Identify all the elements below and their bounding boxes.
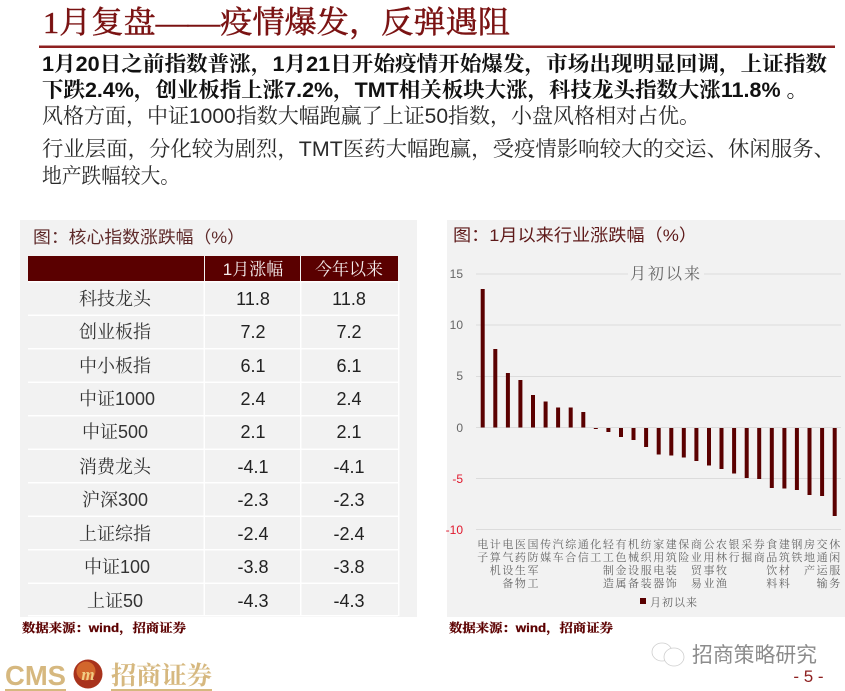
table header: 今年以来 [315,259,383,279]
category labels: 传 [540,537,551,551]
table rows: -2.4 [333,524,365,544]
category labels: 设 [628,564,639,577]
icon: logo emblem: m [81,665,95,684]
y axis labels: 15 [450,267,463,281]
category labels: 备 [628,577,639,590]
category labels: 筑 [779,551,790,564]
table rows: -4.1 [237,457,269,477]
table rows: -4.3 [333,591,365,611]
y axis labels: 0 [456,421,463,435]
category labels: 有 [616,538,626,551]
text block: summary: 风格方面，中证1000指数大幅跑赢了上证50指数，小盘风格相对占优。 [42,105,700,129]
category labels: 装 [641,576,652,590]
category labels: 服 [829,564,840,577]
category labels: 纺 [641,538,652,551]
category labels: 牧 [716,563,727,577]
category labels: 商 [754,550,765,564]
category labels: 械 [628,550,639,564]
category labels: 电 [653,563,664,577]
category labels: 券 [754,538,765,551]
table rows: -3.8 [333,557,365,577]
y axis labels: 5 [456,369,463,383]
category labels: 防 [528,551,538,564]
table rows: 上证50 [87,591,143,611]
panel: core index table [20,220,417,617]
table rows: 6.1 [240,356,266,376]
category labels: 建 [779,537,790,551]
category labels: 物 [515,576,526,590]
icon: chat bubbles [652,643,684,666]
table rows: -2.3 [237,490,269,510]
category labels: 运 [817,564,829,577]
category labels: 造 [603,576,614,590]
chart legend: 月初以来 [650,595,698,609]
category labels: 生 [515,563,526,577]
table rows: -4.3 [237,591,269,611]
category labels: 药 [515,550,526,564]
chart title: 月初以来 [630,265,702,283]
table rows: 上证综指 [79,524,151,544]
category labels: 筑 [666,551,677,564]
category labels: 电 [477,537,488,551]
category labels: 子 [477,551,488,564]
table rows: 6.1 [336,356,362,376]
table rows: 中小板指 [79,356,151,376]
category labels: 通 [817,551,828,564]
panel: industry bar chart [446,220,845,617]
category labels: 采 [741,538,752,551]
category labels: 用 [704,551,714,564]
table header: 1月涨幅 [223,260,283,279]
category labels: 工 [590,551,601,564]
category labels: 钢 [791,537,802,551]
category labels [477,537,840,590]
category labels: 工 [528,577,538,590]
icon: logo emblem [74,660,102,688]
category labels: 制 [603,563,614,577]
y axis labels: -5 [452,472,463,486]
y axis labels: 10 [450,318,463,332]
category labels: 休 [829,537,840,551]
table rows: 创业板指 [79,322,151,342]
table rows: 11.8 [332,289,366,309]
table rows: -2.4 [237,524,269,544]
table rows: -2.3 [333,490,365,510]
category labels: 电 [502,537,513,551]
logo: CMS: 招商证券 [111,662,212,690]
category labels: 车 [553,551,564,564]
table rows: 7.2 [336,322,362,342]
category labels: 金 [616,563,626,577]
category labels: 机 [628,537,639,551]
table rows: 中证500 [82,422,148,442]
table rows [28,281,400,616]
category labels: 属 [616,577,626,590]
left source note: 数据来源：wind，招商证券 [22,620,186,635]
category labels: 器 [653,577,664,590]
category labels: 保 [678,537,689,551]
category labels: 林 [716,550,727,564]
text block: summary: 1月20日之前指数普涨，1月21日开始疫情开始爆发，市场出现明显回调，上证指数 [42,53,827,77]
text block: summary: 地产跌幅较大。 [42,165,180,188]
category labels: 材 [779,563,790,577]
category labels: 房 [804,537,815,551]
category labels: 输 [817,576,828,590]
category labels: 闲 [829,550,840,564]
table rows: 7.2 [240,322,266,342]
y axis labels [446,267,463,537]
table rows: 沪深300 [82,490,148,510]
table rows: 中证100 [84,557,150,577]
category labels: 用 [653,551,664,564]
left panel heading: 图：核心指数涨跌幅（%） [33,228,245,247]
logo: CMS: CMS [5,660,66,691]
category labels: 银 [729,537,740,551]
page number: - 5 - [793,667,824,686]
text block: summary: 行业层面，分化较为剧烈，TMT医药大幅跑赢，受疫情影响较大的交运、休闲服务、 [42,138,835,162]
category labels: 家 [653,537,664,551]
table rows: 中证1000 [79,389,155,409]
category labels: 媒 [540,550,551,564]
table header [28,256,398,281]
title: 1月复盘——疫情爆发，反弹遇阻 [43,5,510,40]
category labels: 色 [616,551,626,564]
right panel heading: 图：1月以来行业涨跌幅（%） [453,226,697,245]
category labels: 商 [691,537,702,551]
category labels: 农 [716,538,727,551]
text block: summary: 下跌2.4%，创业板指上涨7.2%，TMT相关板块大涨，科技龙头指数大涨11.8% 。 [42,79,808,103]
category labels: 食 [766,538,777,551]
category labels: 地 [804,550,815,564]
category labels: 备 [502,577,513,590]
category labels: 公 [704,539,714,551]
category labels: 掘 [741,550,752,564]
category labels: 机 [490,563,501,577]
category labels: 设 [502,564,513,577]
category labels: 汽 [553,538,564,551]
category labels: 产 [804,563,815,577]
table rows: -3.8 [237,557,269,577]
category labels: 气 [502,550,513,564]
category labels: 铁 [791,550,802,564]
category labels: 事 [704,563,714,577]
table rows: 11.8 [236,289,270,309]
category labels: 装 [666,563,677,577]
category labels: 算 [490,550,501,564]
category labels: 饮 [766,564,777,577]
category labels: 轻 [603,538,615,551]
category labels: 计 [490,537,501,551]
category labels: 合 [565,550,576,564]
category labels: 织 [641,551,653,564]
table rows: 2.4 [336,389,362,409]
right source note: 数据来源：wind，招商证券 [449,620,613,635]
category labels: 务 [829,576,840,590]
category labels: 交 [817,537,828,551]
category labels: 业 [691,550,702,564]
category labels: 医 [515,538,526,551]
category labels: 业 [704,576,714,590]
category labels: 易 [691,577,702,590]
category labels: 建 [666,537,677,551]
table rows: 2.1 [240,422,266,442]
category labels: 险 [678,550,689,564]
y axis labels: -10 [446,523,463,537]
category labels: 贸 [691,564,703,577]
category labels: 国 [528,538,538,551]
category labels: 料 [779,576,790,590]
category labels: 品 [766,551,777,564]
title rule [39,46,835,48]
table rows: 消费龙头 [79,457,152,477]
table rows: 2.4 [240,389,266,409]
category labels: 服 [641,564,652,577]
table rows: 2.1 [336,422,362,442]
table rows: 科技龙头 [79,289,152,309]
category labels: 综 [565,537,577,551]
category labels: 工 [603,551,614,564]
category labels: 渔 [716,576,727,590]
category labels: 化 [590,537,601,551]
table rows: -4.1 [333,457,365,477]
category labels: 饰 [666,576,677,590]
category labels: 信 [578,550,589,564]
category labels: 通 [578,538,589,551]
bars [481,289,837,516]
logo: CMS [5,660,212,691]
category labels: 行 [729,551,740,564]
category labels: 军 [528,564,538,577]
category labels: 料 [766,576,777,590]
watermark: 招商策略研究 [692,644,817,667]
text block: summary [42,53,835,188]
